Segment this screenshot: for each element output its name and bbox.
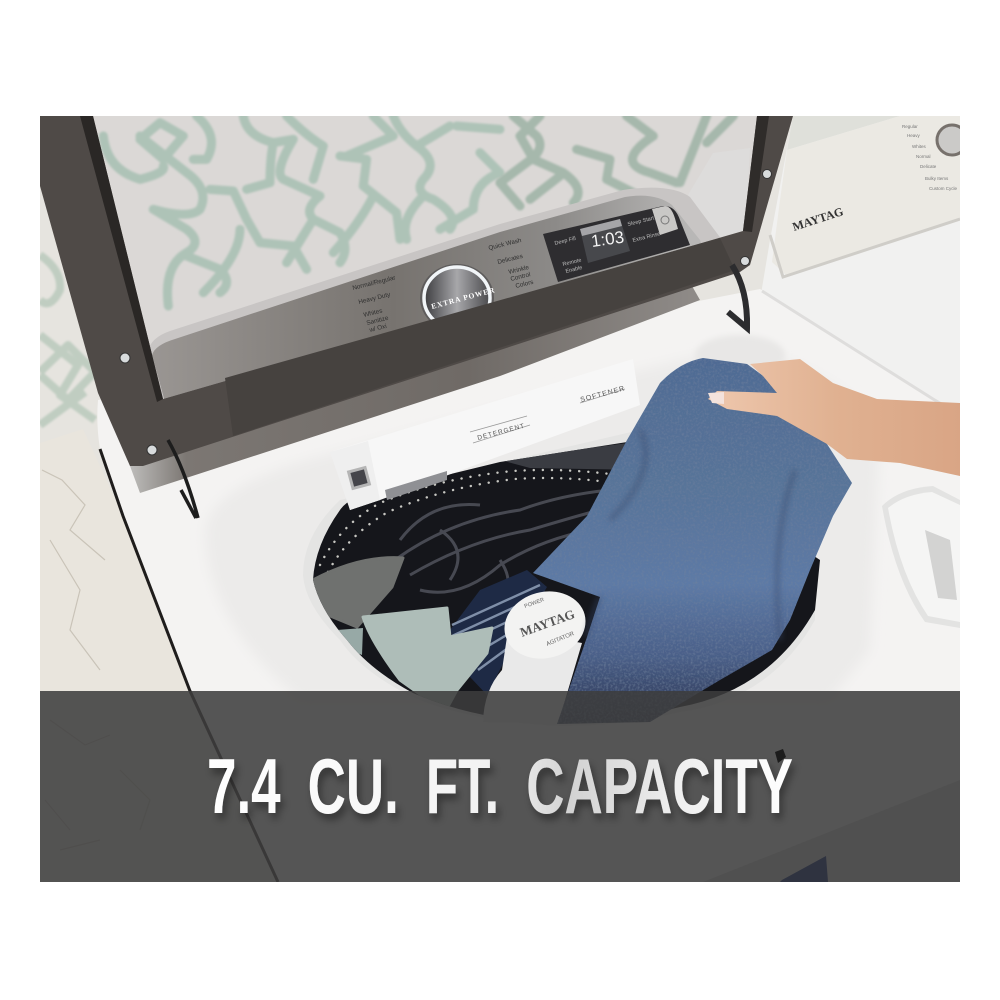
control console face <box>152 196 720 420</box>
dispenser grille <box>385 471 447 500</box>
extra power dial <box>420 264 496 332</box>
dryer cycle labels: Custom Cycle <box>929 186 958 191</box>
cycle labels left: w/ Oxi <box>368 323 387 334</box>
grey cloth <box>313 558 403 627</box>
tub interior <box>313 442 820 715</box>
cycle labels right: Quick Wash <box>488 237 523 252</box>
washer rim ridge <box>762 290 940 402</box>
washer body edge <box>100 449 278 882</box>
cycle labels right: Wrinkle <box>508 264 530 276</box>
agitator: AGITATOR <box>546 631 576 648</box>
white panel behind console <box>688 148 750 240</box>
agitator: MAYTAG <box>518 606 577 640</box>
display screen <box>580 219 630 263</box>
dryer logo: MAYTAG <box>791 204 845 234</box>
tub opening wall <box>398 689 748 690</box>
wallpaper lattice through glass <box>103 116 500 306</box>
lid under-strip reflection <box>130 286 700 493</box>
dispenser left cap <box>346 498 380 510</box>
washer corner notch <box>775 749 786 763</box>
blue towel <box>533 358 852 724</box>
dryer cycle labels <box>902 124 958 191</box>
lid frame <box>40 116 793 466</box>
control console rim <box>148 188 722 420</box>
dryer back strip <box>787 116 900 150</box>
agitator: POWER <box>524 597 545 610</box>
drum perforations <box>320 470 610 572</box>
dryer panel trim <box>770 219 960 277</box>
lid frame dark bottom section <box>225 238 735 436</box>
dryer dial <box>936 124 960 156</box>
dryer cycle labels: Normal <box>916 154 931 159</box>
label rule lines <box>470 389 625 443</box>
display labels: Deep Fill <box>554 236 577 247</box>
cycle labels left <box>352 274 396 334</box>
lid frame inner dark edge <box>80 116 163 402</box>
lid hinge left <box>168 440 198 518</box>
wall pattern at left <box>40 255 95 425</box>
dark patterned garment <box>398 490 601 594</box>
fold shadow behind hand <box>699 336 782 357</box>
cycle labels right <box>488 237 534 290</box>
display labels: Extra Rinse <box>632 231 661 244</box>
display labels: Enable <box>565 265 583 275</box>
lid screws <box>120 170 772 455</box>
cycle labels left: Sanitize <box>366 315 390 327</box>
product photo infographic <box>40 116 960 882</box>
countertop veining <box>42 470 106 670</box>
display panel <box>543 206 690 282</box>
display labels <box>554 215 661 275</box>
display labels: Remote <box>562 257 582 268</box>
arm and hand <box>708 359 960 476</box>
maytag front badge <box>780 856 828 882</box>
power button <box>652 206 678 235</box>
wallpaper background <box>40 118 792 502</box>
display labels: Sleep Start <box>627 215 655 228</box>
detergent label: DETERGENT <box>477 422 526 442</box>
softener label: SOFTENER <box>580 385 626 404</box>
cycle labels right: Colors <box>515 279 534 290</box>
cycle labels left: Heavy Duty <box>358 291 392 306</box>
dryer control panel <box>772 116 960 276</box>
cycle labels right: Delicates <box>497 253 524 266</box>
pale green towel <box>363 608 492 712</box>
extra power dial: EXTRA POWER <box>430 285 496 311</box>
towel fold shadows <box>587 430 795 640</box>
fabric softener cup <box>882 486 960 628</box>
small pale towel <box>337 628 363 655</box>
cycle labels left: Whites <box>363 307 383 319</box>
lid hinge right <box>728 265 747 328</box>
lid window view <box>90 116 760 420</box>
dryer cycle labels: Whites <box>912 144 927 149</box>
washer white top deck <box>97 289 960 691</box>
dryer cycle labels: Regular <box>902 124 918 129</box>
dispenser drawer <box>346 370 640 510</box>
display time: 1:03 <box>590 228 625 251</box>
neighbouring dryer <box>762 124 960 403</box>
dark overlay band <box>40 691 960 882</box>
countertop <box>40 536 188 691</box>
dryer cycle labels: Delicate <box>920 164 937 169</box>
dryer cycle labels: Heavy <box>907 133 921 138</box>
cycle labels right: Control <box>510 271 531 283</box>
tub upper rim shadow <box>504 443 626 470</box>
washer front corner <box>703 780 960 882</box>
agitator <box>484 591 586 723</box>
striped garment <box>450 570 547 695</box>
washer deck recess <box>205 345 880 700</box>
dryer cycle labels: Bulky Items <box>925 176 949 181</box>
cycle labels left: Normal/Regular <box>352 274 396 292</box>
